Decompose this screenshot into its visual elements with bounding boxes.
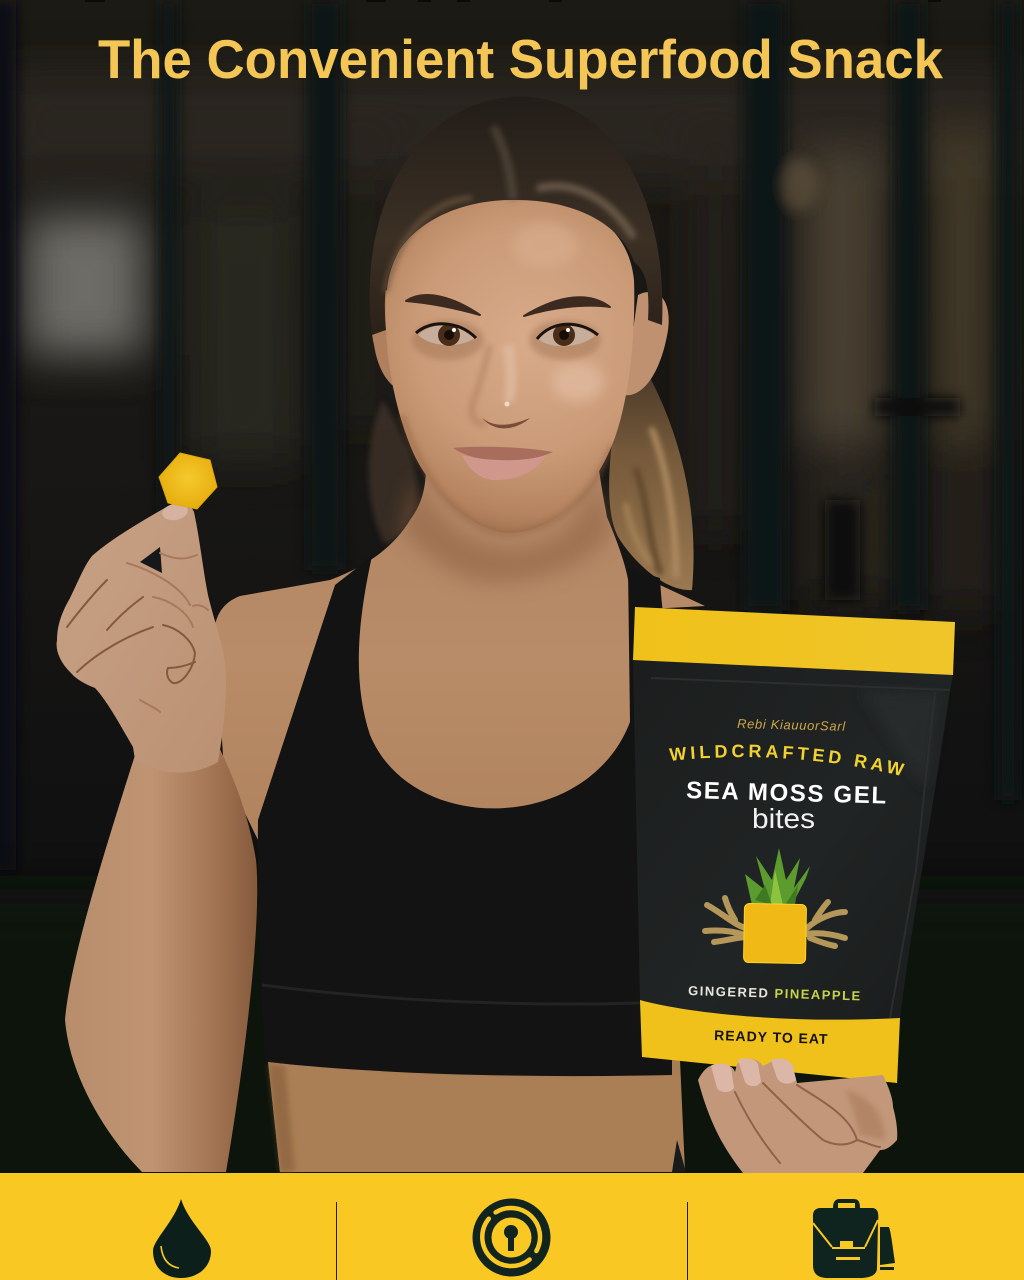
top edge marks xyxy=(85,0,941,2)
ginger cube xyxy=(743,903,807,964)
pouch body xyxy=(633,660,953,1083)
finger creases xyxy=(67,553,208,712)
divider xyxy=(687,1202,688,1280)
icon: water drop xyxy=(153,1199,211,1278)
pineapple and ginger illustration xyxy=(705,848,845,964)
pouch brand script: Rebi KiauuorSarl xyxy=(737,716,846,734)
right ear xyxy=(624,292,669,395)
model xyxy=(57,97,705,1172)
hair xyxy=(370,97,662,335)
feature bar xyxy=(0,1173,1024,1280)
right eyebrow xyxy=(524,297,610,316)
pouch sheen xyxy=(860,690,940,790)
right eye xyxy=(529,320,601,360)
pouch flavour: GINGERED PINEAPPLE xyxy=(688,983,862,1003)
snack piece xyxy=(159,453,217,509)
left eyebrow xyxy=(406,295,480,315)
left side hair strands xyxy=(369,400,417,545)
neck shadow xyxy=(400,480,612,583)
finger shading xyxy=(735,1083,880,1163)
icon: backpack xyxy=(813,1199,895,1278)
pouch product name: SEA MOSS GEL xyxy=(686,777,887,810)
finger nails xyxy=(711,1058,796,1092)
thumb nail xyxy=(161,502,189,522)
stomach xyxy=(268,1062,685,1172)
holding hand xyxy=(698,1058,897,1173)
pouch ready to eat: READY TO EAT xyxy=(714,1027,828,1047)
hand xyxy=(57,502,226,773)
palm and fingers xyxy=(698,1059,897,1173)
pouch seam xyxy=(651,678,950,1018)
face and head xyxy=(370,97,669,534)
chin shadow xyxy=(402,415,612,534)
divider xyxy=(336,1202,337,1280)
sports top xyxy=(258,556,672,1076)
top yellow band xyxy=(633,607,955,675)
top waistband seam xyxy=(262,985,640,1004)
left eye xyxy=(412,320,484,360)
left ear xyxy=(371,290,400,390)
ponytail xyxy=(609,345,694,590)
face shape xyxy=(386,196,634,533)
gap between index finger and thumb xyxy=(140,547,162,573)
bottom yellow band xyxy=(640,1000,900,1083)
pouch bites: bites xyxy=(752,803,815,834)
raised arm xyxy=(65,745,257,1172)
lips xyxy=(453,447,553,480)
hair highlights xyxy=(386,130,632,290)
nose xyxy=(472,345,530,428)
product pouch xyxy=(633,607,955,1083)
icon: concentric rings with keyhole xyxy=(472,1198,550,1276)
pineapple leaves xyxy=(745,848,810,905)
pouch heading: WILDCRAFTED RAW xyxy=(668,744,905,776)
cheek highlight xyxy=(552,362,604,402)
torso xyxy=(213,440,705,1172)
title: The Convenient Superfood Snack xyxy=(98,28,943,90)
